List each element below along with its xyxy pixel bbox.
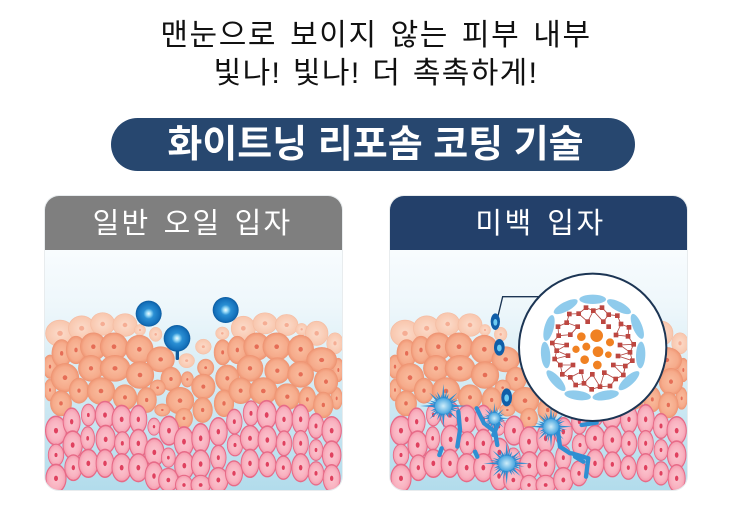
- panel header: gray: [45, 196, 342, 250]
- skin cell layers: [43, 313, 344, 495]
- whitening burst 4: [483, 442, 530, 485]
- panel header: gray: 일반 오일 입자: [93, 208, 292, 240]
- magnified particle: [519, 274, 666, 421]
- whitening burst 3: [530, 405, 572, 448]
- panel: regular oil particles: [45, 196, 342, 490]
- heading pill: 화이트닝 리포솜 코팅 기술: [167, 124, 584, 166]
- blue spread between cells: [439, 408, 597, 477]
- illustration: skin cells and oil particles: [45, 297, 342, 490]
- panel header: navy: 미백 입자: [475, 208, 606, 240]
- title: second line: 빛나! 빛나! 더 촉촉하게!: [214, 57, 538, 90]
- panel: whitening particles: [390, 196, 687, 490]
- oil particle right: [213, 297, 239, 323]
- red molecule network: [550, 306, 636, 391]
- lens circle: [519, 274, 666, 421]
- panel header: navy: [390, 196, 687, 250]
- capsule 3: [501, 388, 512, 406]
- title: first line: 맨눈으로 보이지 않는 피부 내부: [160, 19, 592, 52]
- heading pill: [111, 118, 635, 171]
- orange core: [573, 330, 614, 369]
- illustration: skin cells, whitening particles and magnified view: [390, 272, 687, 490]
- whitening burst 1: [420, 384, 467, 428]
- outer lipid ring: [540, 295, 647, 402]
- leader line: [498, 297, 540, 316]
- skin cell layers: [388, 313, 689, 495]
- oil particle left: [136, 301, 162, 327]
- oil particle with drip: [164, 325, 190, 360]
- capsule 1: [491, 313, 500, 330]
- capsule 2: [494, 339, 505, 356]
- whitening burst 2: [479, 403, 510, 434]
